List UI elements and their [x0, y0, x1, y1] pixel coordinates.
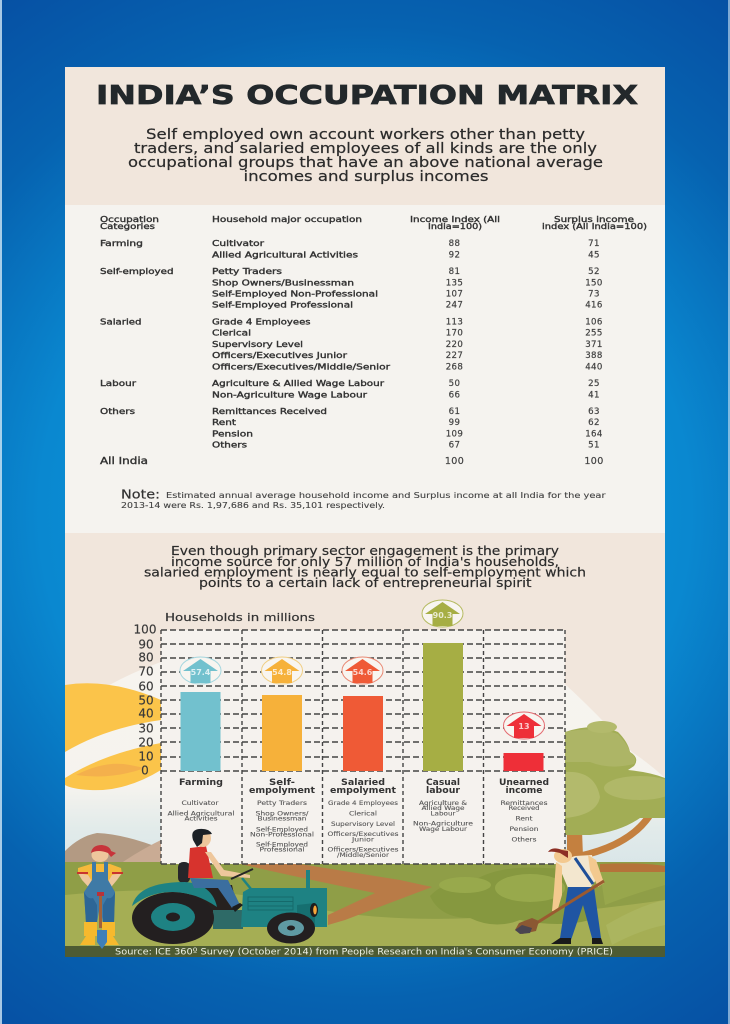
illustration: woman farmer with spade: [77, 845, 123, 949]
column: farming: Allied Agricultural: [168, 810, 235, 818]
table rows: others: 63: [588, 407, 600, 417]
table rows: labour: Non-Agriculture Wage Labour: [212, 390, 368, 400]
table row: all india: 100: [445, 456, 464, 467]
column: casual labour: Allied Wage: [422, 805, 465, 812]
table row: all india: 100: [584, 456, 604, 467]
table rows: salaried: 371: [585, 340, 603, 350]
column: self-employment: Self-Employed: [256, 842, 308, 848]
column: salaried employment: Clerical: [349, 810, 377, 818]
table rows: others: 67: [449, 440, 460, 450]
table header: Surplus income: [554, 214, 634, 224]
table rows: others: Others: [100, 406, 135, 416]
table rows: salaried: 220: [446, 340, 463, 350]
table rows: salaried: Clerical: [212, 328, 251, 338]
table rows: self-employed: 247: [446, 300, 463, 310]
table rows: labour: [100, 378, 600, 400]
column: salaried employment: empolyment: [330, 786, 397, 796]
subtitle: Self employed own account workers other than petty: [146, 127, 585, 143]
y axis labels: 40: [138, 706, 154, 720]
y axis labels: 50: [138, 694, 154, 708]
table rows: others: 99: [449, 418, 460, 428]
table rows: farming: [100, 238, 600, 260]
subtitle: incomes and surplus incomes: [244, 169, 488, 185]
table rows: labour: 41: [588, 390, 600, 400]
table rows: self-employed: 150: [585, 278, 603, 288]
table row: all india: All India: [100, 456, 148, 467]
y axis labels: 30: [138, 722, 154, 736]
column: salaried employment: Officers/Executives: [328, 846, 398, 854]
table rows: self-employed: 81: [449, 267, 460, 277]
table rows: salaried: 268: [446, 362, 463, 372]
y axis labels: [134, 622, 156, 778]
mountains: [65, 833, 161, 862]
note: Note:: [121, 486, 160, 502]
bar: self-employment 54.8: 54.8: [272, 668, 292, 677]
column: self-employment: Self-Employed: [256, 826, 308, 834]
table header: Income Index (All: [410, 214, 500, 224]
title: INDIA’S OCCUPATION MATRIX: [96, 81, 638, 111]
column: casual labour: Labour: [430, 810, 456, 818]
table rows: salaried: Supervisory Level: [212, 339, 303, 349]
table rows: others: 61: [449, 407, 460, 417]
illustration: man digging with shovel: [515, 848, 604, 944]
table header: [100, 214, 647, 231]
column: salaried employment: [328, 778, 398, 859]
column: self-employment: Self-: [269, 778, 295, 788]
bar: salaried employment 54.6: [342, 657, 383, 771]
column: farming: Farming: [179, 778, 223, 788]
table rows: self-employed: Petty Traders: [212, 266, 282, 276]
table rows: others: Others: [212, 440, 247, 450]
column: unearned income: Pension: [510, 826, 539, 833]
table rows: labour: 25: [588, 379, 600, 389]
chart heading: Even though primary sector engagement is the primary: [171, 544, 559, 558]
column: unearned income: income: [506, 786, 542, 796]
table rows: labour: Agriculture & Allied Wage Labour: [212, 378, 385, 388]
column: self-employment: Non-Professional: [250, 832, 314, 838]
illustration: man on green tractor: [132, 829, 327, 944]
column: salaried employment: Junior: [351, 836, 375, 844]
bar: casual labour 90.3: [422, 600, 463, 771]
table row: all india: [100, 456, 604, 467]
table rows: self-employed: Self-Employed Professional: [212, 300, 353, 310]
column: unearned income: Rent: [516, 816, 533, 822]
table rows: self-employed: Self-Employed Non-Professional: [212, 288, 378, 298]
table rows: salaried: [100, 316, 603, 372]
table rows: self-employed: 135: [446, 278, 463, 288]
column: casual labour: Casual: [426, 778, 460, 788]
table rows: salaried: 170: [446, 328, 463, 338]
table rows: farming: Cultivator: [212, 238, 265, 248]
column: casual labour: Agriculture &: [419, 800, 467, 807]
column: self-employment: Petty Traders: [257, 800, 307, 807]
table rows: salaried: 440: [585, 362, 603, 372]
table rows: labour: 66: [449, 390, 460, 400]
y axis labels: 60: [138, 680, 154, 694]
panel: title header: [65, 67, 665, 205]
y axis labels: 10: [138, 750, 154, 764]
bar: self-employment 54.8: [262, 657, 302, 771]
column: salaried employment: Officers/Executives: [328, 831, 398, 838]
panel: occupation table: [65, 205, 665, 533]
y axis labels: 90: [138, 638, 154, 652]
column: salaried employment: /Middle/Senior: [337, 852, 390, 859]
bar: farming 57.4: 57.4: [191, 668, 211, 677]
table rows: farming: Farming: [100, 238, 143, 248]
bar: farming 57.4: [180, 657, 221, 771]
table rows: farming: Allied Agricultural Activities: [212, 250, 358, 260]
table header: Categories: [100, 221, 155, 231]
table rows: self-employed: Shop Owners/Businessman: [212, 278, 354, 288]
tree: [565, 721, 665, 858]
y axis labels: 80: [138, 650, 154, 664]
chart panel and grid: [161, 630, 565, 864]
column: salaried employment: Supervisory Level: [331, 821, 395, 828]
y axis labels: 100: [134, 622, 156, 636]
background dome: [65, 662, 665, 870]
y axis labels: 70: [138, 664, 154, 678]
table rows: others: [100, 406, 603, 450]
chart heading: salaried employment is nearly equal to self-employment which: [144, 566, 586, 580]
table rows: self-employed: 52: [588, 267, 600, 277]
column: salaried employment: Grade 4 Employees: [328, 800, 398, 807]
bar: unearned income 13: 13: [518, 722, 530, 731]
table rows: others: 62: [588, 418, 600, 428]
table rows: self-employed: 107: [446, 290, 463, 300]
column: self-employment: [249, 778, 316, 854]
ground: [65, 862, 665, 952]
column: unearned income: Received: [508, 805, 540, 812]
table rows: salaried: Officers/Executives/Middle/Senior: [212, 362, 391, 372]
column: casual labour: Non-Agriculture: [413, 820, 473, 828]
table rows: others: Remittances Received: [212, 406, 327, 416]
source bar: Source: ICE 360º Survey (October 2014) from People Research on India's Consumer Economy (PRICE): [115, 948, 613, 958]
column: self-employment: empolyment: [249, 786, 316, 796]
column: unearned income: [499, 778, 549, 844]
note: 2013-14 were Rs. 1,97,686 and Rs. 35,101 respectively.: [121, 501, 385, 510]
table rows: salaried: 255: [585, 328, 603, 338]
column: farming: Cultivator: [182, 800, 219, 807]
subtitle: [128, 127, 603, 185]
column: casual labour: labour: [426, 786, 461, 796]
table header: Occupation: [100, 214, 159, 224]
table rows: farming: 88: [449, 239, 460, 249]
table rows: salaried: 113: [446, 318, 463, 328]
table rows: self-employed: 73: [588, 290, 600, 300]
column: unearned income: Unearned: [499, 778, 549, 788]
sun: [65, 683, 161, 790]
note: Estimated annual average household income and Surplus income at all India for the year: [166, 491, 606, 500]
table rows: farming: 92: [449, 250, 460, 260]
panel: household chart section: [65, 533, 676, 958]
column: unearned income: Remittances: [500, 800, 548, 807]
table rows: others: 51: [588, 440, 600, 450]
table rows: others: 164: [585, 430, 603, 440]
bar: unearned income 13: [504, 712, 544, 771]
table rows: labour: Labour: [100, 378, 137, 388]
column: salaried employment: Salaried: [341, 778, 385, 788]
source bar: [65, 946, 665, 958]
column: unearned income: Others: [512, 836, 536, 844]
table rows: farming: 71: [588, 239, 600, 249]
table rows: salaried: 227: [446, 351, 463, 361]
table header: India=100): [428, 221, 482, 231]
table rows: others: Rent: [212, 417, 237, 427]
table header: index (All India=100): [542, 221, 647, 231]
column: casual labour: [413, 778, 473, 833]
bar: salaried employment 54.6: 54.6: [353, 668, 373, 677]
column: farming: Activities: [184, 816, 218, 822]
bar: casual labour 90.3: 90.3: [433, 611, 452, 620]
table rows: self-employed: [100, 266, 603, 310]
column: self-employment: Businessman: [258, 816, 307, 822]
column: self-employment: Professional: [260, 846, 305, 854]
chart heading: [144, 544, 586, 590]
chart heading: income source for only 57 million of India's households,: [171, 555, 559, 569]
subtitle: traders, and salaried employees of all kinds are the only: [134, 141, 597, 157]
table rows: salaried: Salaried: [100, 316, 142, 326]
column: farming: [168, 778, 235, 822]
y axis labels: 0: [141, 764, 149, 778]
subtitle: occupational groups that have an above national average: [128, 155, 603, 171]
table rows: self-employed: Self-employed: [100, 266, 174, 276]
table rows: labour: 50: [449, 379, 460, 389]
y axis labels: 20: [138, 736, 154, 750]
table rows: farming: 45: [588, 250, 600, 260]
table rows: others: 109: [446, 430, 463, 440]
table rows: self-employed: 416: [585, 300, 603, 310]
column: casual labour: Wage Labour: [419, 826, 468, 833]
y axis title: Households in millions: [165, 611, 315, 624]
table header: Household major occupation: [212, 214, 362, 224]
note: [121, 486, 606, 510]
table rows: salaried: Grade 4 Employees: [212, 316, 310, 326]
bushes: [430, 868, 590, 925]
table rows: others: Pension: [212, 428, 253, 438]
table rows: salaried: Officers/Executives Junior: [212, 350, 348, 360]
chart heading: points to a certain lack of entrepreneurial spirit: [199, 576, 532, 590]
table rows: salaried: 388: [585, 351, 603, 361]
column: self-employment: Shop Owners/: [256, 810, 310, 818]
table rows: salaried: 106: [585, 318, 603, 328]
